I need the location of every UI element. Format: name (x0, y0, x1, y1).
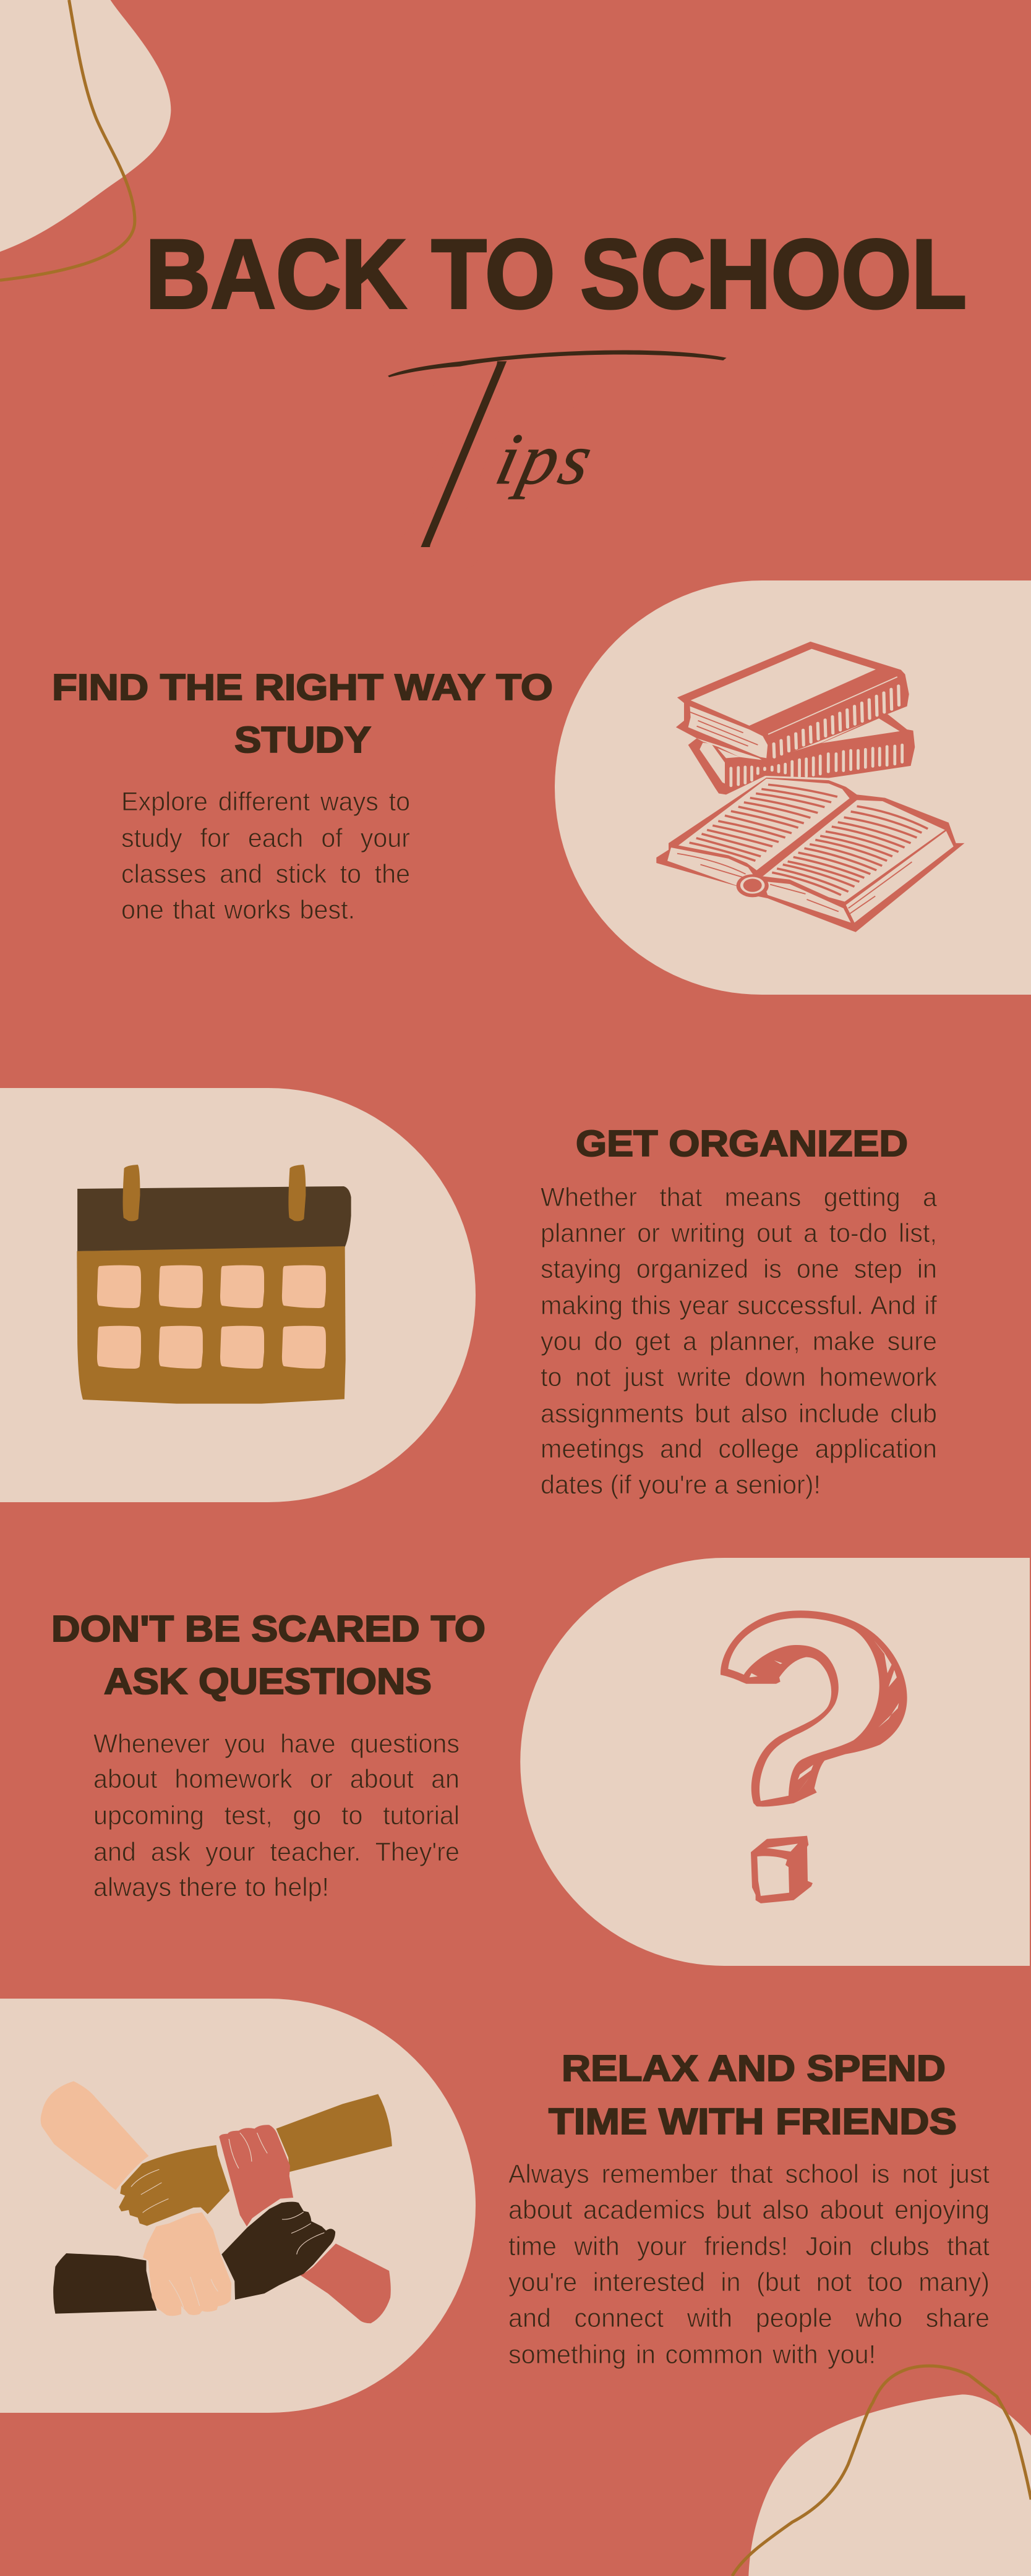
title: BACK TO SCHOOL (145, 219, 967, 329)
subtitle: Tips: ips (489, 419, 603, 499)
text block: friends tip: and connect with people who share (508, 2303, 990, 2333)
icon: question mark (721, 1610, 907, 1903)
decorative blob: bottom right (732, 2366, 1031, 2576)
text block: friends tip: Always remember that school is not just (508, 2159, 990, 2189)
text block: study tip: one that works best. (121, 895, 355, 925)
text block: friends tip (508, 2159, 990, 2370)
text block: organization tip: dates (if you're a senior)! (541, 1470, 821, 1500)
decorative blob: top left (0, 0, 171, 280)
heading: don't be scared to ask questions: ASK QUESTIONS (104, 1661, 432, 1702)
open book (656, 778, 964, 932)
heading: find the right way to study (52, 667, 553, 760)
text block: organization tip: planner or writing out a to-do list, (541, 1218, 937, 1248)
panel: study shape (555, 580, 1031, 995)
text block: study tip: study for each of your (121, 823, 410, 853)
icon: linked hands (41, 2081, 392, 2323)
heading: relax and spend time with friends: RELAX AND SPEND (562, 2048, 946, 2089)
text block: organization tip: making this year successful. And if (541, 1291, 937, 1320)
middle book (688, 714, 915, 794)
heading: relax and spend time with friends: TIME WITH FRIENDS (549, 2101, 957, 2142)
top book (676, 642, 909, 762)
subtitle: Tips: T (329, 277, 610, 626)
panel: friends shape (0, 1999, 476, 2413)
icon: stack of books (656, 642, 964, 932)
panel: calendar shape (0, 1088, 476, 1502)
heading: don't be scared to ask questions: DON'T BE SCARED TO (51, 1609, 486, 1649)
text block: questions tip: and ask your teacher. They're (93, 1837, 460, 1867)
heading: get organized: GET ORGANIZED (576, 1123, 908, 1164)
text block: questions tip: about homework or about an (93, 1764, 460, 1794)
text block: questions tip (93, 1729, 460, 1902)
text block: questions tip: always there to help! (93, 1872, 329, 1902)
text block: organization tip: you do get a planner, make sure (541, 1327, 937, 1356)
text block: organization tip: staying organized is one step in (541, 1254, 937, 1284)
heading: find the right way to study: FIND THE RIGHT WAY TO (52, 667, 553, 708)
text block: organization tip (541, 1183, 937, 1500)
panel: question shape (520, 1558, 1030, 1966)
text block: study tip: Explore different ways to (121, 787, 410, 817)
text block: organization tip: to not just write down homework (541, 1362, 937, 1392)
heading: don't be scared to ask questions (51, 1609, 486, 1702)
text block: study tip (121, 787, 410, 925)
text block: organization tip: Whether that means getting a (541, 1183, 937, 1212)
text block: study tip: classes and stick to the (121, 859, 410, 889)
icon: calendar (77, 1165, 351, 1404)
text block: organization tip: assignments but also include club (541, 1399, 937, 1429)
text block: questions tip: Whenever you have questions (93, 1729, 460, 1759)
text block: questions tip: upcoming test, go to tutorial (93, 1801, 460, 1830)
text block: friends tip: time with your friends! Join clubs that (508, 2232, 990, 2261)
text block: friends tip: something in common with you! (508, 2340, 876, 2370)
heading: find the right way to study: STUDY (234, 720, 371, 760)
text block: organization tip: meetings and college application (541, 1434, 937, 1464)
text block: friends tip: about academics but also about enjoying (508, 2195, 990, 2225)
heading: relax and spend time with friends (549, 2048, 957, 2142)
text block: friends tip: you're interested in (but not too many) (508, 2268, 990, 2297)
subtitle: Tips (329, 277, 727, 626)
